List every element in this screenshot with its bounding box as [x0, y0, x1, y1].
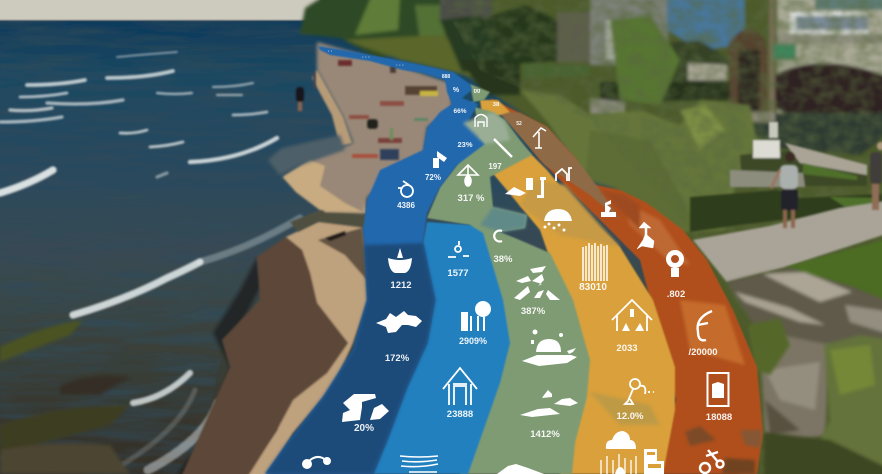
light blue column — [400, 241, 491, 472]
main walkway — [693, 200, 882, 282]
icon: monument — [601, 200, 616, 217]
ribbon labels at the far shoreline: · · · — [362, 55, 370, 61]
green column — [458, 114, 578, 474]
stat: 1577: 1577 — [447, 268, 469, 279]
stat: 83010: 83010 — [579, 282, 607, 293]
trees and houses — [300, 0, 882, 155]
icon: ship — [388, 248, 412, 273]
icon: key shape — [625, 379, 654, 404]
yellow column — [505, 177, 664, 474]
stat: 4386: 4386 — [397, 201, 415, 210]
stat: 387%: 387% — [521, 306, 546, 317]
icon: spiral G — [494, 230, 502, 242]
stat: 317%: 317 % — [458, 193, 485, 204]
stat: 38%: 38% — [493, 254, 513, 265]
stat: 172%: 172% — [385, 353, 410, 364]
icon: cabin — [556, 168, 572, 181]
band: sage green layer — [427, 84, 590, 474]
stat: 1412%: 1412% — [530, 429, 560, 440]
shoreline rim — [312, 70, 352, 146]
yellow weathered boards — [520, 180, 620, 247]
icon: water lines — [400, 456, 438, 472]
icon: hut arch — [475, 114, 487, 127]
icon: tall grass bars — [583, 243, 607, 281]
grass — [785, 238, 882, 305]
stat: 12000: /20000 — [688, 347, 718, 358]
icon: rain lines and city — [601, 449, 664, 474]
sky — [0, 0, 320, 20]
shallows near waders — [268, 135, 345, 175]
stat: 12.0%: 12.0% — [617, 411, 644, 422]
stat: 23888: 23888 — [447, 409, 473, 420]
reed texture — [510, 20, 760, 232]
sand rim — [283, 160, 363, 212]
light green top wash — [463, 112, 510, 144]
icon: cloud and rain — [544, 209, 572, 232]
lawn and paths behind reeds — [690, 122, 882, 232]
band: rust soil layer — [490, 98, 763, 474]
dark navy lower shading — [265, 243, 435, 474]
stat: 72%: 72% — [425, 173, 441, 182]
wet brown sand — [178, 237, 348, 474]
water ripple texture — [0, 21, 350, 474]
ribbon labels at the far shoreline: 52 — [516, 121, 522, 127]
dark wave bands and seaweed — [0, 257, 262, 474]
stat: 197: 197 — [488, 162, 502, 171]
icon: oar — [494, 139, 512, 157]
icon: mountains — [497, 464, 544, 474]
stat: 2033: 2033 — [616, 343, 638, 354]
ribbon labels at the far shoreline: · · — [328, 49, 333, 55]
ribbon labels at the far shoreline: % — [453, 87, 460, 94]
icon: reef cluster — [376, 311, 422, 333]
rocks — [727, 268, 882, 440]
icon: tree and figure — [461, 301, 491, 331]
ribbon labels at the far shoreline: · · · — [396, 63, 404, 69]
icon: umbrella — [458, 165, 478, 186]
dark blue column — [302, 140, 473, 469]
icon: storm clouds — [342, 394, 389, 422]
icon: house with figures — [612, 300, 652, 331]
icon: small tower top — [533, 128, 546, 148]
band: yellow ochre layer — [480, 100, 675, 474]
icon: fish — [505, 187, 526, 196]
icon: house outline — [443, 368, 477, 405]
ribbon labels at the far shoreline: 00 — [474, 89, 481, 95]
icon: windmill — [637, 222, 654, 249]
icon: curling leaf — [698, 311, 712, 340]
icon: float line — [448, 241, 469, 257]
reeds and shrubs — [520, 90, 758, 232]
beachgoers and towels — [296, 60, 438, 160]
icon: ring with wave — [398, 181, 413, 197]
whitecaps — [0, 52, 300, 470]
stat: 18088: 18088 — [706, 412, 732, 423]
land base — [430, 0, 882, 474]
ribbon labels at the far shoreline — [328, 49, 522, 127]
stat: 290%: 2909% — [459, 336, 487, 346]
icon: framed device — [708, 373, 728, 406]
icon: three clouds — [520, 390, 578, 417]
icon: headphone arc — [302, 457, 331, 469]
dark strip and wrack on shore — [290, 195, 367, 280]
band: light blue layer — [373, 222, 510, 474]
ribbon labels at the far shoreline: 66% — [453, 108, 467, 115]
icon: cloud with pin — [606, 431, 636, 449]
rust weathering patches — [590, 190, 762, 474]
icon: sun over cloud — [522, 330, 577, 366]
pedestrians — [771, 142, 882, 228]
stat: 23%: 23% — [457, 140, 473, 149]
stat: 20%: 20% — [354, 423, 374, 434]
ribbon labels at the far shoreline: 38 — [493, 102, 500, 108]
stat: 1212: 1212 — [390, 280, 412, 291]
icon: bulb gauge — [666, 250, 684, 277]
shrubs bottom right — [748, 318, 882, 474]
mid band patch — [480, 207, 527, 232]
rust column — [533, 128, 732, 473]
icon: gears — [700, 450, 724, 473]
tan sand — [238, 221, 368, 474]
ribbon labels at the far shoreline: 888 — [442, 74, 450, 80]
icon: signpost — [526, 177, 546, 198]
upper beach — [283, 42, 452, 213]
rust upper tan wash — [497, 110, 620, 220]
icon: pines and ridges — [514, 266, 560, 300]
icon: boat hull — [433, 151, 447, 168]
stat: 802: .802 — [667, 289, 685, 300]
band: dark blue layer — [265, 46, 485, 474]
